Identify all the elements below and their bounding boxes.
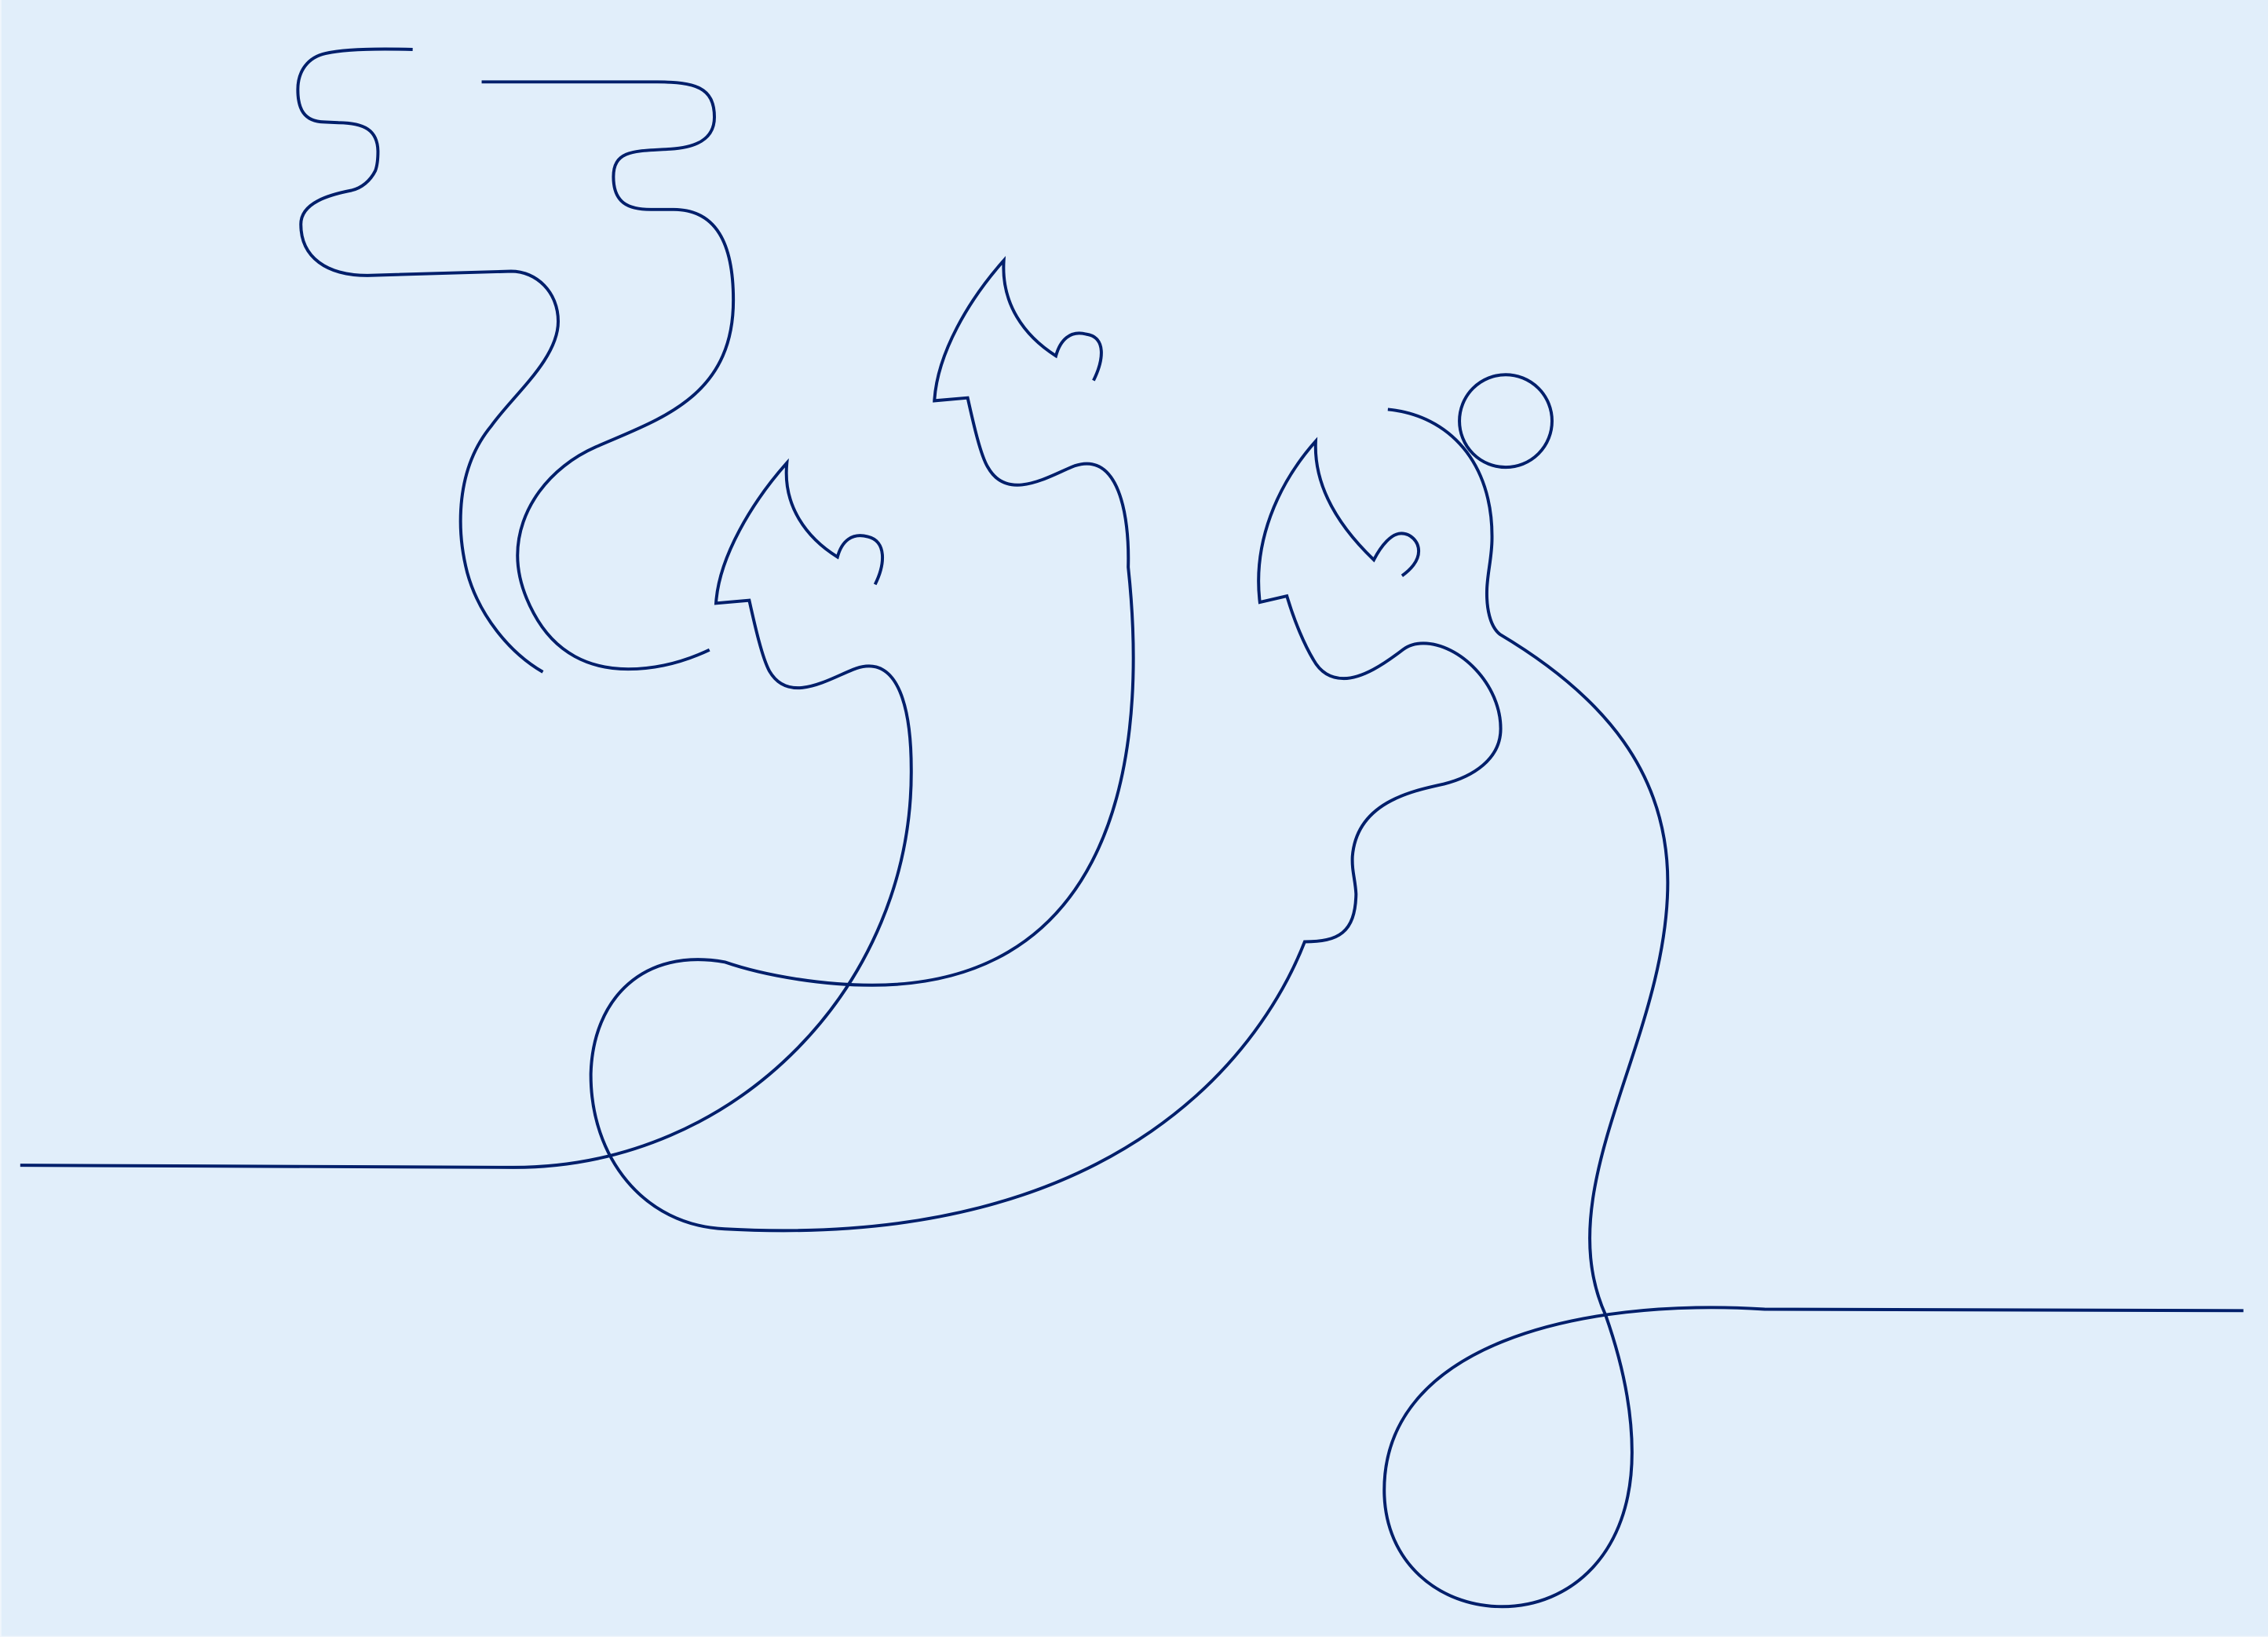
bird two and bird three joined line: [591, 261, 1501, 1230]
bird one with line to left edge: [20, 463, 911, 1167]
left smoke line: [298, 49, 558, 672]
circle: [1459, 375, 1552, 467]
body loop with line to right edge: [1384, 409, 2244, 1606]
right smoke line: [482, 82, 733, 669]
